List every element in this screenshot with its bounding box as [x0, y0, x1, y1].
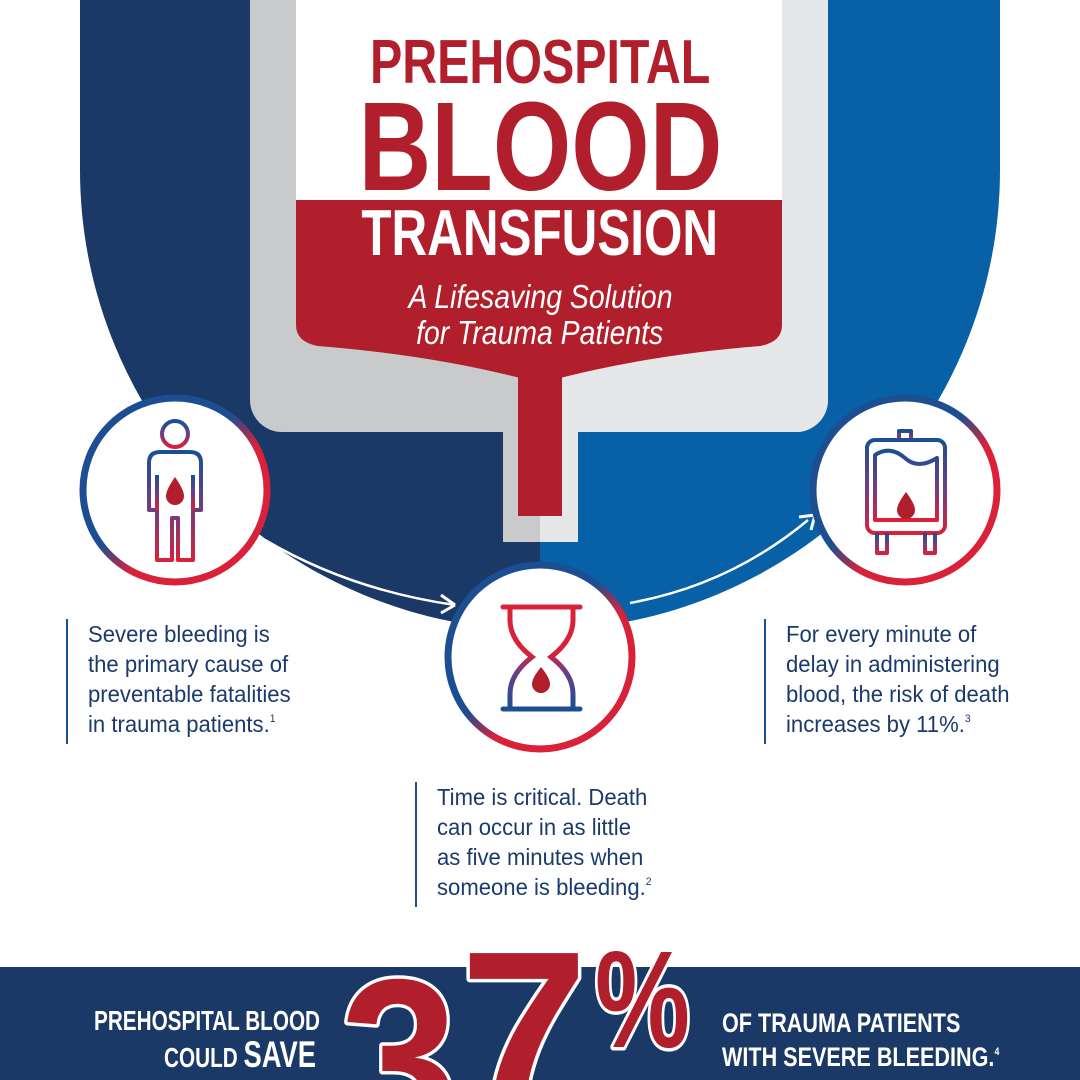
- title: PREHOSPITAL: [370, 28, 710, 97]
- banner left text: PREHOSPITAL BLOOD: [94, 1005, 320, 1036]
- text block: minute of delay: increases by 11%.3: [786, 711, 971, 737]
- text block: severe bleeding: preventable fatalities: [88, 681, 291, 707]
- arrows: [265, 520, 808, 605]
- icon: blood bag: [867, 431, 945, 553]
- banner left text: [94, 1005, 320, 1075]
- title: TRANSFUSION: [362, 196, 718, 269]
- icon: hourglass: [503, 607, 580, 709]
- circles: [83, 398, 267, 582]
- text block: severe bleeding: [66, 619, 328, 744]
- big stat 37%: [340, 905, 690, 1080]
- blood bag: [250, 0, 828, 542]
- text block: severe bleeding: Severe bleeding is: [88, 621, 270, 647]
- text block: minute of delay: blood, the risk of death: [786, 681, 1009, 707]
- banner right text: OF TRAUMA PATIENTS: [722, 1008, 960, 1038]
- title: for Trauma Patients: [416, 314, 664, 351]
- title: A Lifesaving Solution: [408, 278, 672, 315]
- banner right text: [722, 1008, 1000, 1072]
- text block: severe bleeding: the primary cause of: [88, 651, 288, 677]
- text block: severe bleeding: in trauma patients.1: [88, 711, 275, 737]
- bottom banner: [0, 967, 1080, 1080]
- text block: time is critical: can occur in as little: [437, 814, 631, 840]
- title: BLOOD: [358, 76, 722, 217]
- text block: time is critical: [415, 782, 677, 907]
- icon: person: [149, 421, 201, 560]
- title: [358, 28, 722, 351]
- banner right text: WITH SEVERE BLEEDING.4: [722, 1042, 999, 1072]
- text block: time is critical: someone is bleeding.2: [437, 874, 652, 900]
- U shape: [80, 0, 1000, 622]
- text block: time is critical: as five minutes when: [437, 844, 643, 870]
- text block: time is critical: Time is critical. Death: [437, 784, 647, 810]
- text block: minute of delay: delay in administering: [786, 651, 1000, 677]
- banner left text: COULD SAVE: [164, 1034, 316, 1075]
- text block: minute of delay: [764, 619, 1046, 744]
- text block: minute of delay: For every minute of: [786, 621, 976, 647]
